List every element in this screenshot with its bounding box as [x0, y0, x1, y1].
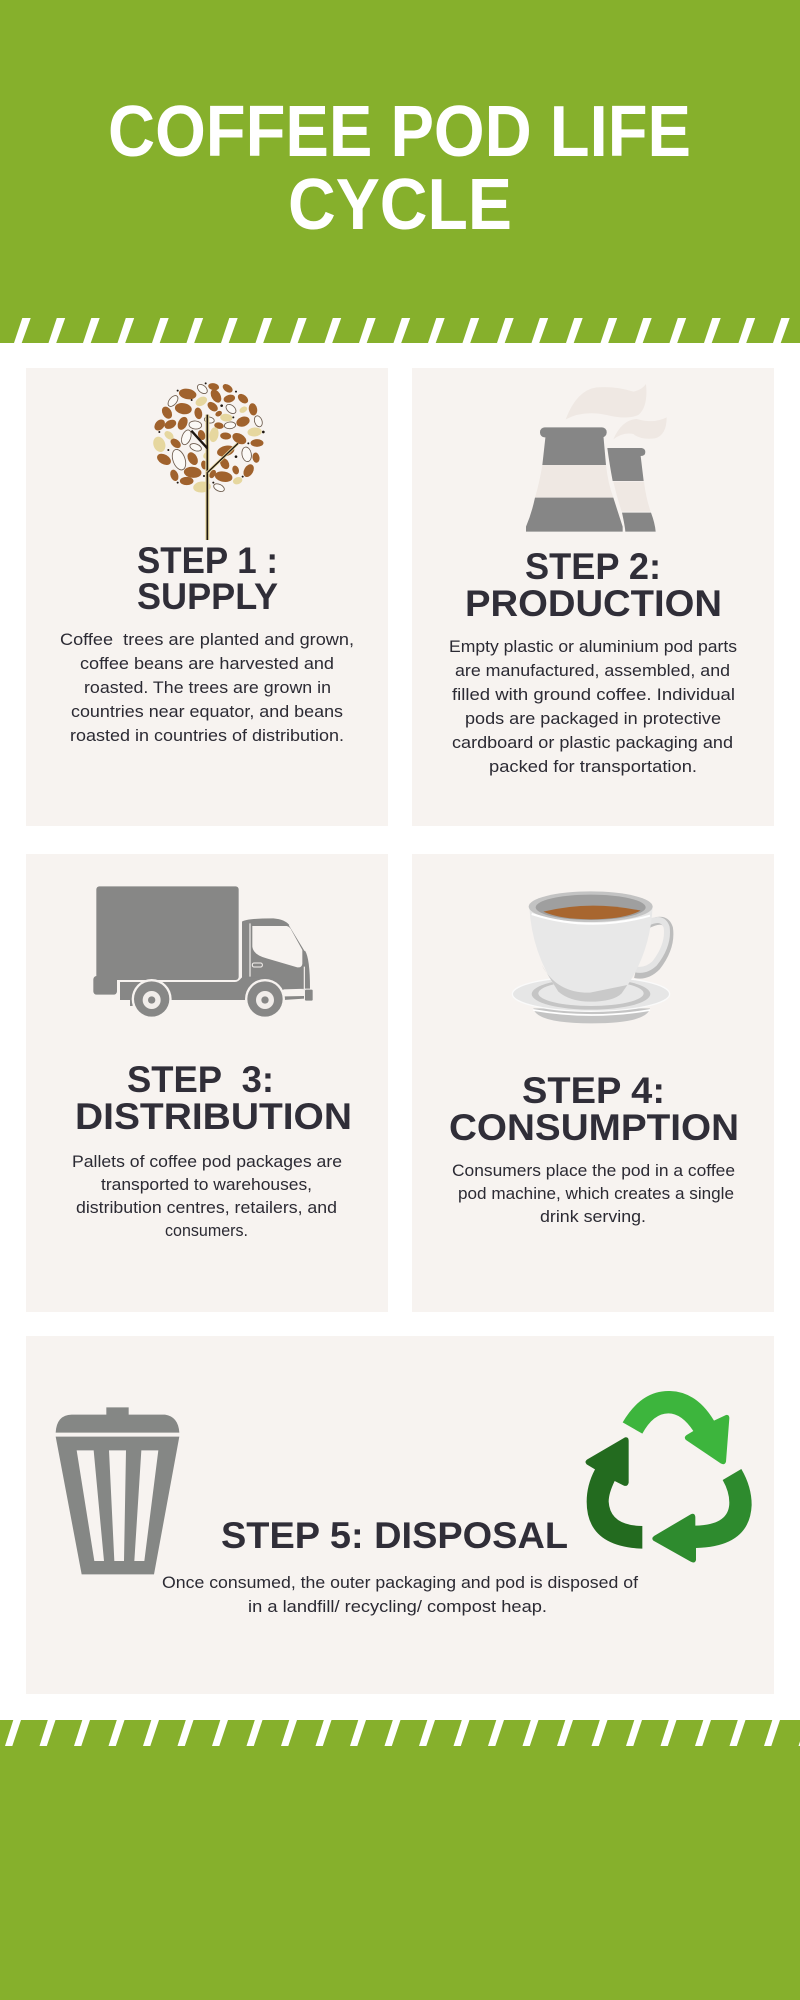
footer banner — [0, 1720, 800, 2000]
heading: step 1: STEP 1 : — [137, 540, 278, 581]
text: step 4 description: pod machine, which creates a single — [458, 1185, 734, 1203]
text: step 2 description — [449, 638, 737, 776]
heading: step 4: STEP 4: — [522, 1070, 665, 1111]
title: COFFEE POD LIFE — [108, 92, 691, 172]
panel: step 1 supply — [26, 368, 388, 826]
panel: step 5 disposal — [26, 1336, 774, 1694]
heading: step 2 — [465, 546, 722, 624]
text: step 3 description: transported to warehouses, — [101, 1176, 312, 1194]
heading: step 1: SUPPLY — [137, 576, 278, 617]
heading: step 3 — [75, 1059, 352, 1137]
header banner with title — [0, 0, 800, 343]
heading: step 4: CONSUMPTION — [449, 1107, 739, 1148]
text: step 1 description: coffee beans are harvested and — [80, 655, 334, 673]
icon: delivery truck — [93, 886, 313, 1019]
text: step 1 description: roasted. The trees are grown in — [84, 679, 331, 697]
text: step 3 description: distribution centres, retailers, and — [76, 1199, 337, 1217]
text: step 4 description: drink serving. — [540, 1208, 646, 1226]
heading: step 4 — [449, 1070, 739, 1148]
text: step 2 description: filled with ground coffee. Individual — [452, 686, 735, 704]
title — [108, 92, 691, 245]
text: step 3 description: Pallets of coffee pod packages are — [72, 1153, 342, 1171]
heading: step 1 — [137, 540, 278, 617]
icon: factory cooling towers — [526, 384, 667, 532]
text: step 5 description: Once consumed, the outer packaging and pod is disposed of — [162, 1574, 638, 1592]
panel: step 4 consumption — [412, 854, 774, 1312]
text: step 2 description: cardboard or plastic packaging and — [452, 734, 733, 752]
text: step 5 description: in a landfill/ recycling/ compost heap. — [248, 1598, 547, 1616]
panel: step 3 distribution — [26, 854, 388, 1312]
text: step 1 description: roasted in countries of distribution. — [70, 727, 344, 745]
text: step 3 description — [72, 1153, 342, 1240]
text: step 2 description: pods are packaged in protective — [465, 710, 721, 728]
heading: step 3: STEP 3: — [127, 1059, 274, 1100]
text: step 2 description: packed for transportation. — [489, 758, 697, 776]
text: step 2 description: are manufactured, assembled, and — [455, 662, 730, 680]
heading: step 2: PRODUCTION — [465, 583, 722, 624]
text: step 5 description — [162, 1574, 638, 1616]
text: step 1 description: Coffee trees are planted and grown, — [60, 631, 354, 649]
panel: step 2 production — [412, 368, 774, 826]
icon: coffee bean tree — [152, 382, 265, 540]
text: step 1 description — [60, 631, 354, 745]
icon: coffee cup on saucer — [512, 891, 670, 1023]
text: step 4 description: Consumers place the pod in a coffee — [452, 1162, 735, 1180]
text: step 1 description: countries near equator, and beans — [71, 703, 343, 721]
text: step 3 description: consumers. — [165, 1222, 248, 1240]
heading: step 5: STEP 5: DISPOSAL — [221, 1515, 568, 1556]
icon: trash can — [56, 1407, 179, 1574]
heading: step 2: STEP 2: — [525, 546, 661, 587]
text: step 4 description — [452, 1162, 735, 1226]
title: CYCLE — [288, 165, 512, 245]
text: step 2 description: Empty plastic or aluminium pod parts — [449, 638, 737, 656]
heading: step 3: DISTRIBUTION — [75, 1096, 352, 1137]
icon: recycling arrows — [585, 1391, 752, 1563]
